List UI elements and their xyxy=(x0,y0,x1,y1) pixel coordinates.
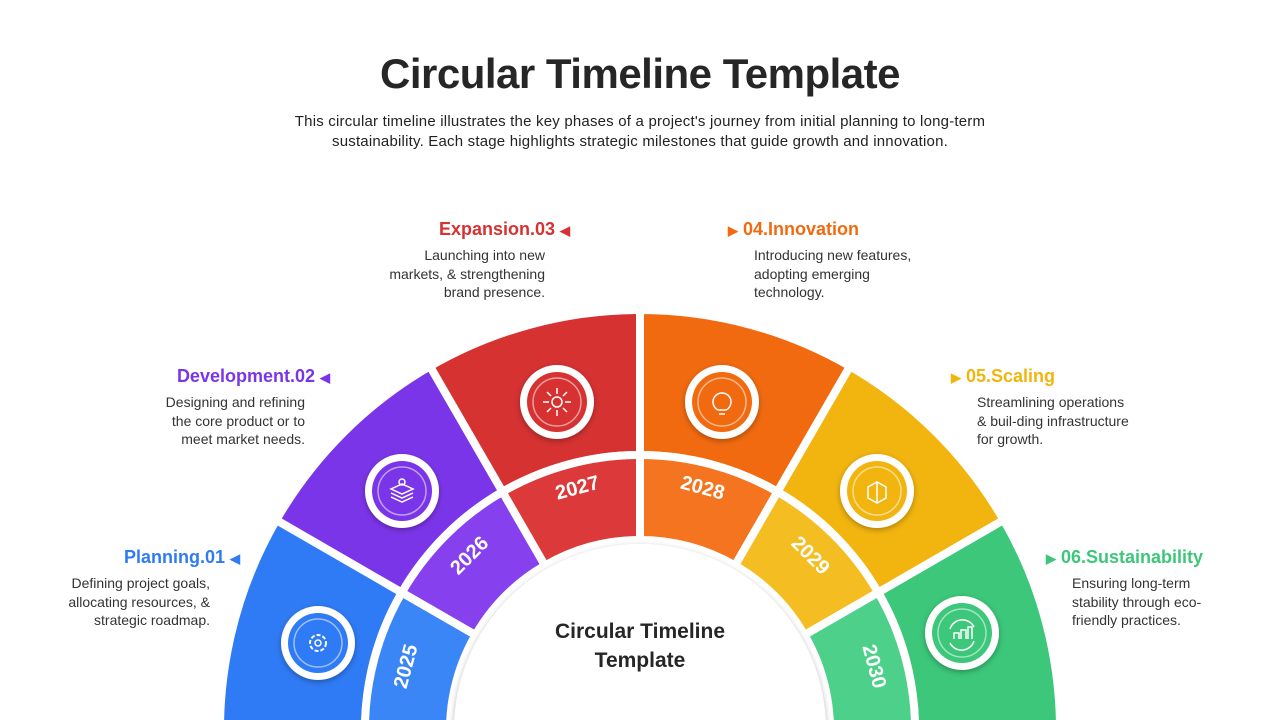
label: scaling xyxy=(950,366,1129,447)
years: 2029 xyxy=(787,532,834,579)
year band: purple xyxy=(402,492,545,635)
segment: purple xyxy=(276,366,502,592)
segment: yellow xyxy=(778,366,1004,592)
label: sustainability: Ensuring long-term stability through eco-friendly practices. xyxy=(1072,575,1201,628)
label: planning xyxy=(68,547,240,628)
year band: green xyxy=(804,592,915,720)
segment: red xyxy=(430,310,640,492)
years: 2027 xyxy=(553,472,602,505)
label: scaling: Streamlining operations xyxy=(977,394,1124,410)
label: scaling: & buil-ding infrastructure xyxy=(977,412,1129,428)
label: scaling: ▶ 05.Scaling xyxy=(951,366,1055,386)
segment: blue xyxy=(220,520,402,720)
icon: planning xyxy=(281,606,355,680)
label: planning: Planning.01 ◀ xyxy=(124,547,240,567)
years: 2025 xyxy=(390,642,423,691)
segment: green xyxy=(878,520,1060,720)
label: development: Designing and refining the core product or to meet market needs. xyxy=(166,394,305,447)
icon: expansion xyxy=(520,365,594,439)
chart: semicircle timeline: Template xyxy=(595,649,685,672)
icon: scaling xyxy=(840,454,914,528)
center circle xyxy=(454,544,826,720)
segment: orange xyxy=(640,310,850,492)
label: sustainability xyxy=(1046,547,1203,628)
icon: innovation xyxy=(685,365,759,439)
label: innovation: Introducing new features, adopting emerging technology. xyxy=(754,247,911,300)
subtitle: This circular timeline illustrates the key phases of a project's journey from initial planning to long-term sustainability. Each stage highlights strategic milestones that guide growth and innovation. xyxy=(295,113,985,150)
label: expansion: Expansion.03 ◀ xyxy=(439,219,570,239)
label: innovation xyxy=(728,219,911,300)
label: planning: Defining project goals, allocating resources, & strategic roadmap. xyxy=(68,575,210,628)
years: 2026 xyxy=(446,532,493,579)
label: scaling: for growth. xyxy=(977,431,1043,447)
years xyxy=(390,472,890,691)
label: expansion: Launching into new markets, & strengthening brand presence. xyxy=(389,247,545,300)
label: development: Development.02 ◀ xyxy=(177,366,330,386)
year band: blue xyxy=(365,592,476,720)
label: innovation: ▶ 04.Innovation xyxy=(728,219,859,239)
icon: development xyxy=(365,454,439,528)
year band: orange xyxy=(640,455,778,566)
icon: sustainability xyxy=(925,596,999,670)
year band: red xyxy=(502,455,640,566)
years: 2028 xyxy=(678,472,727,505)
center text: Circular Timeline xyxy=(555,620,725,643)
year band: yellow xyxy=(735,492,878,635)
label: expansion xyxy=(389,219,570,300)
title: Circular Timeline Template xyxy=(380,50,900,97)
label: development xyxy=(166,366,330,447)
label: sustainability: ▶ 06.Sustainability xyxy=(1046,547,1203,567)
years: 2030 xyxy=(857,642,890,691)
